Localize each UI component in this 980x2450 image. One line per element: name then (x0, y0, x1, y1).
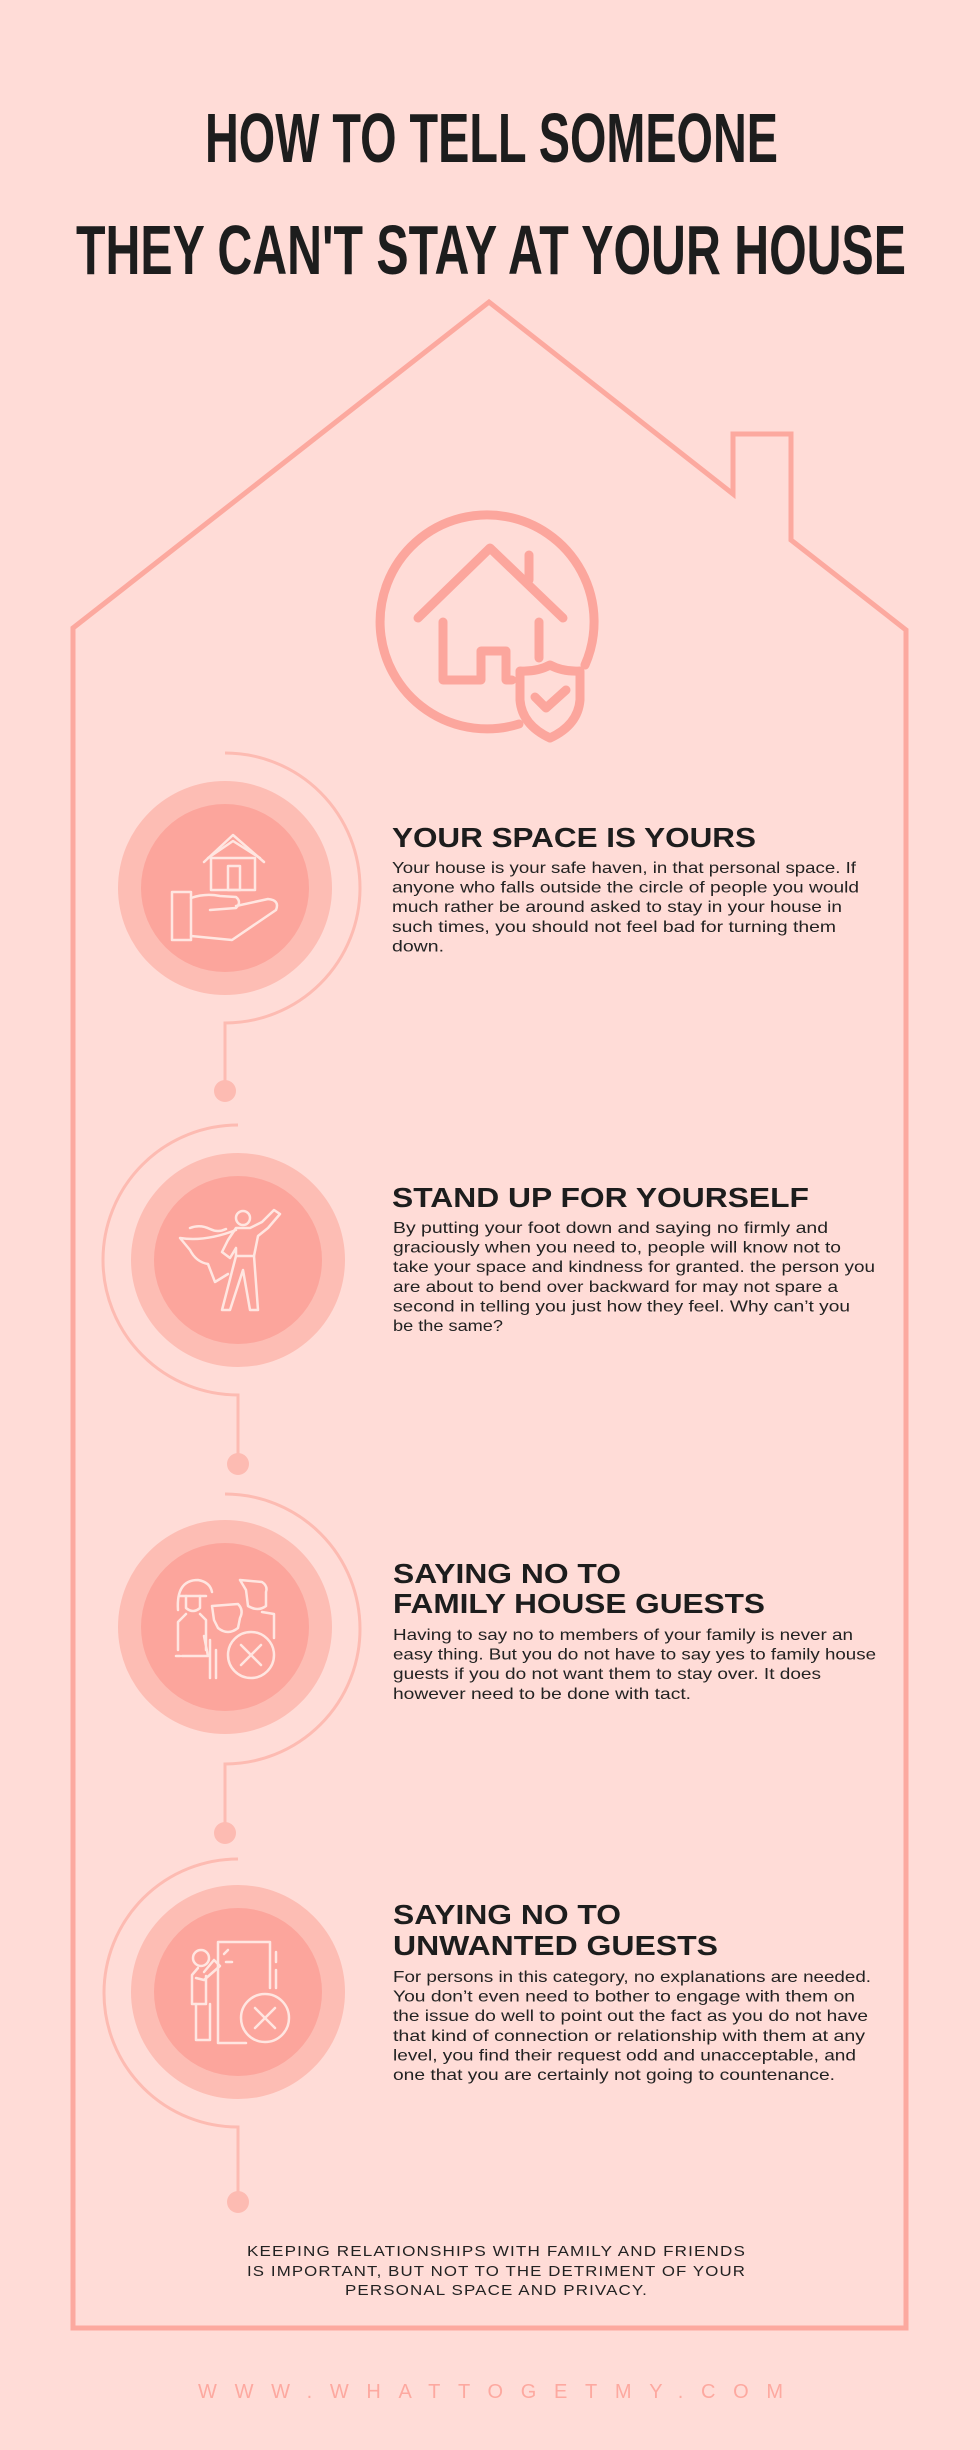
heading 4: UNWANTED GUESTS (393, 1930, 718, 1961)
heading 4 (393, 1899, 718, 1961)
body 2: be the same? (393, 1318, 503, 1335)
body 1: much rather be around asked to stay in your house in (392, 899, 842, 916)
body 4: You don’t even need to bother to engage with them on (393, 1989, 855, 2006)
heading 4: SAYING NO TO (393, 1899, 621, 1930)
connector arc 4 (104, 1859, 249, 2213)
icon: house with shield (380, 515, 594, 738)
heading 1: YOUR SPACE IS YOURS (392, 822, 756, 853)
body 3: guests if you do not want them to stay over. It does (393, 1666, 821, 1683)
body 1 (392, 860, 859, 955)
title (76, 99, 906, 289)
section 1: your space is yours (118, 753, 859, 1102)
heading 3: FAMILY HOUSE GUESTS (393, 1588, 765, 1619)
body 1: Your house is your safe haven, in that personal space. If (392, 860, 857, 877)
section 4: saying no to unwanted guests (104, 1859, 871, 2213)
body 4: For persons in this category, no explanations are needed. (393, 1969, 871, 1986)
body 3 (393, 1627, 876, 1703)
footer website: WWW.WHATTOGETMY.COM (198, 2381, 783, 2403)
closing statement: IS IMPORTANT, BUT NOT TO THE DETRIMENT OF YOUR (247, 2263, 746, 2280)
icon circle 2: superhero (131, 1153, 345, 1367)
icon circle 1: hand holding house (118, 781, 332, 995)
section 3: saying no to family house guests (118, 1494, 876, 1844)
closing statement: PERSONAL SPACE AND PRIVACY. (345, 2282, 648, 2299)
heading 3: SAYING NO TO (393, 1558, 621, 1589)
heading 2: STAND UP FOR YOURSELF (392, 1182, 809, 1213)
body 2: take your space and kindness for granted. the person you (393, 1259, 875, 1276)
icon circle 3: family with cross (118, 1520, 332, 1734)
body 3: however need to be done with tact. (393, 1686, 691, 1703)
connector arc 1 (214, 753, 360, 1102)
body 3: easy thing. But you do not have to say yes to family house (393, 1647, 876, 1664)
closing statement: KEEPING RELATIONSHIPS WITH FAMILY AND FRIENDS (247, 2243, 746, 2260)
body 2: are about to bend over backward for may not spare a (393, 1279, 838, 1296)
body 2: By putting your foot down and saying no firmly and (393, 1220, 828, 1237)
section 2: stand up for yourself (103, 1125, 875, 1475)
body 4: one that you are certainly not going to countenance. (393, 2067, 835, 2084)
body 1: anyone who falls outside the circle of people you would (392, 880, 859, 897)
body 2: second in telling you just how they feel. Why can’t you (393, 1298, 850, 1315)
body 4: level, you find their request odd and unacceptable, and (393, 2047, 856, 2064)
body 2: graciously when you need to, people will know not to (393, 1240, 841, 1257)
icon circle 4: person at door with cross (131, 1885, 345, 2099)
closing statement (247, 2243, 746, 2299)
body 1: down. (392, 938, 444, 955)
connector arc 3 (214, 1494, 360, 1844)
body 4: the issue do well to point out the fact as you do not have (393, 2008, 868, 2025)
body 2 (393, 1220, 875, 1335)
body 3: Having to say no to members of your family is never an (393, 1627, 853, 1644)
body 1: such times, you should not feel bad for turning them (392, 919, 836, 936)
connector arc 2 (103, 1125, 249, 1475)
house outline frame (73, 302, 906, 2328)
body 4 (393, 1969, 871, 2084)
body 4: that kind of connection or relationship with them at any (393, 2028, 865, 2045)
heading 3 (393, 1558, 765, 1619)
